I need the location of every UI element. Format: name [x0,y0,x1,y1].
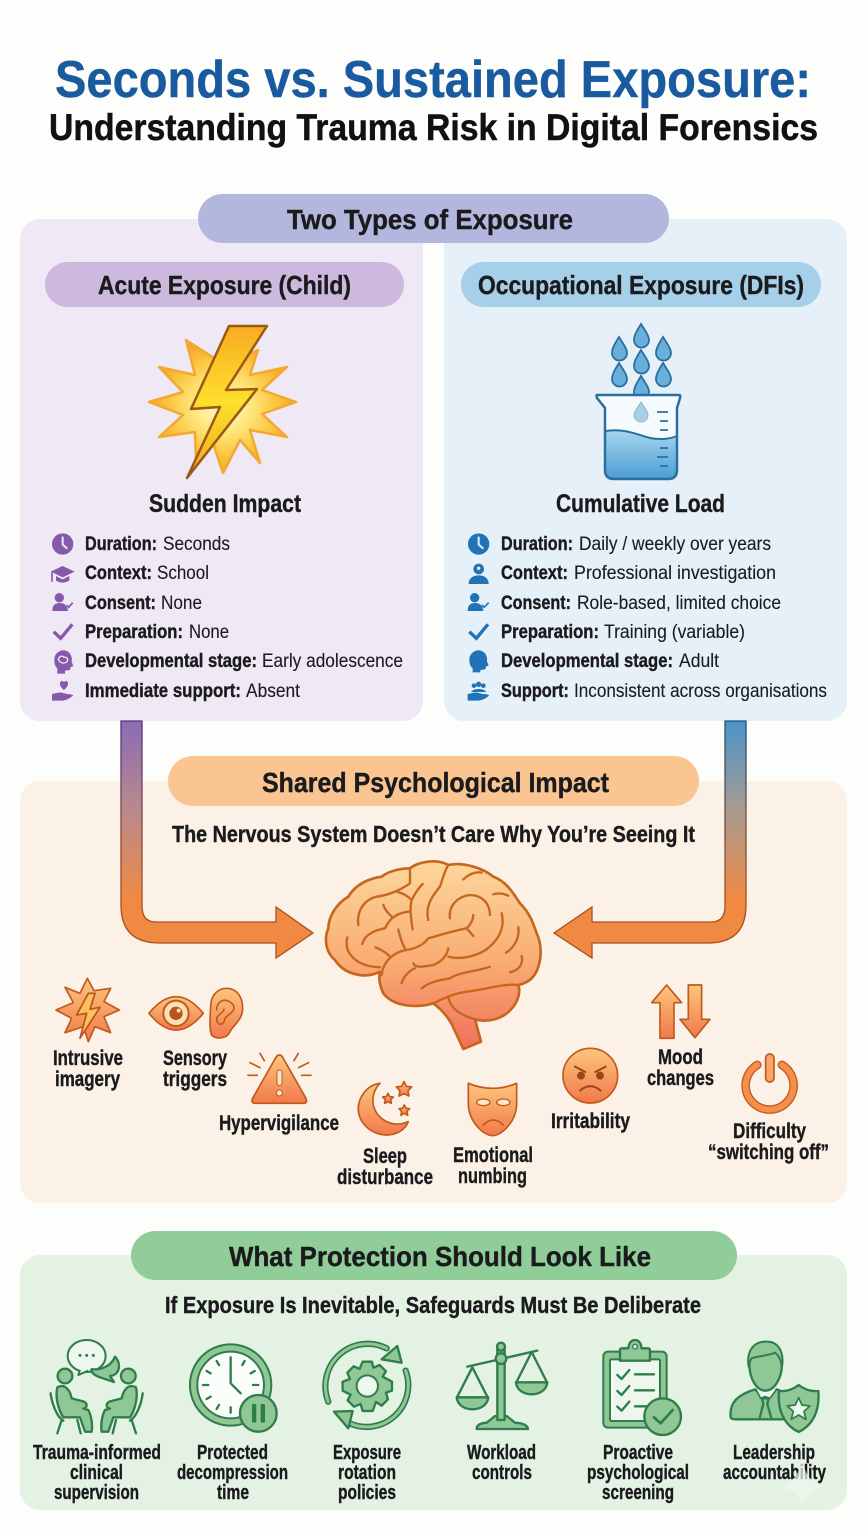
symptom: intrusive imagery: imagery [55,1068,120,1091]
safeguard: clinical supervision: supervision [54,1482,139,1504]
row: consent: None [161,593,202,614]
row: immediate support: Immediate support: [85,681,241,702]
safeguard: protected decompression time: Protected [197,1442,268,1464]
row: developmental stage [54,650,403,674]
row: support [468,681,827,702]
symptom: hypervigilance: Hypervigilance [219,1112,339,1135]
symptom: emotional numbing: numbing [458,1165,527,1188]
icon: beaker with drops [596,324,680,479]
row: duration: Duration: [501,534,573,555]
safeguard: psychological screening: Proactive [603,1442,673,1464]
row: context [469,563,776,584]
heading: what protection [131,1231,737,1280]
symptom: emotional numbing: Emotional [453,1144,533,1167]
list: occupational attributes [468,533,827,702]
symptom: intrusive imagery [53,978,123,1091]
symptom: difficulty switching off: “switching off” [708,1141,829,1164]
arrow: acute to brain [121,721,313,958]
row: consent: Consent: [501,593,571,614]
subheading: safeguards: If Exposure Is Inevitable, Safeguards Must Be Deliberate [165,1292,701,1318]
row: preparation: None [189,622,229,643]
row: context [51,563,209,584]
row: preparation [469,622,745,643]
sparkle watermark [780,1456,824,1505]
row: developmental stage: Developmental stage: [85,651,257,672]
row: immediate support: Absent [246,681,301,702]
symptom: sleep disturbance [337,1082,433,1189]
safeguard: exposure rotation: rotation [338,1462,396,1484]
row: developmental stage: Adult [679,651,720,672]
subheading: sudden impact: Sudden Impact [149,490,302,518]
safeguard: psychological screening [587,1340,689,1504]
symptom: mood changes [647,985,714,1090]
safeguard: psychological screening: screening [602,1482,674,1504]
symptom: sensory triggers: triggers [163,1068,227,1091]
row: context: Context: [85,563,152,584]
safeguard: protected decompression time: decompression [177,1462,288,1484]
heading: acute exposure: Acute Exposure (Child) [98,270,351,300]
panel: what protection should look like [20,1231,847,1510]
panel: occupational exposure [444,219,847,721]
list: acute attributes [51,533,403,702]
symptom: difficulty switching off [708,1054,829,1164]
safeguard: exposure rotation: policies [338,1482,396,1504]
row: context: School [157,563,209,584]
heading: shared psychological impact [168,756,699,806]
icon: brain [326,861,541,1049]
symptom: intrusive imagery: Intrusive [53,1047,123,1070]
row: support: Inconsistent across organisations [574,681,827,702]
heading: two types of exposure: Two Types of Exposure [287,204,573,235]
symptom: irritability: Irritability [551,1110,630,1133]
row: developmental stage: Developmental stage: [501,651,673,672]
row: duration [52,533,230,555]
safeguard: psychological screening: psychological [587,1462,689,1484]
safeguard: clinical supervision [33,1340,161,1504]
arrow: occupational to brain [554,721,746,958]
subheading: nervous system: The Nervous System Doesn’t Care Why You’re Seeing It [172,821,695,847]
subheading: cumulative load: Cumulative Load [556,490,725,518]
symptom: sensory triggers [149,988,243,1091]
panel: shared psychological impact [20,721,847,1203]
safeguard: clinical supervision: clinical [70,1462,123,1484]
row: context: Professional investigation [574,563,776,584]
row: preparation: Preparation: [501,622,599,643]
safeguard: workload controls [457,1343,547,1484]
heading: occupational exposure: Occupational Exposure (DFIs) [478,270,804,300]
heading: what protection: What Protection Should Look Like [229,1241,651,1272]
row: preparation: Preparation: [85,622,183,643]
symptom: sleep disturbance: Sleep [363,1145,407,1168]
row: duration: Duration: [85,534,157,555]
safeguard: leadership accountability: accountability [723,1462,827,1484]
row: consent: Consent: [85,593,156,614]
row: duration [468,533,771,555]
symptom: sensory triggers: Sensory [163,1047,227,1070]
safeguard: workload controls: controls [472,1462,532,1484]
row: duration: Daily / weekly over years [579,534,771,555]
row: context: Context: [501,563,568,584]
safeguard: leadership accountability [723,1342,827,1505]
heading: occupational exposure [461,262,821,307]
safeguard: exposure rotation: Exposure [333,1442,401,1464]
symptom: sleep disturbance: disturbance [337,1166,433,1189]
safeguard: clinical supervision: Trauma-informed [33,1442,161,1464]
panel: acute exposure [20,219,423,721]
title [49,51,818,148]
row: consent: Role-based, limited choice [577,593,781,614]
safeguard: protected decompression time: time [217,1482,249,1504]
symptom: irritability [551,1048,630,1133]
row: duration: Seconds [163,534,230,555]
row: developmental stage: Early adolescence [262,651,403,672]
row: consent [468,593,781,614]
icon: lightning burst [149,326,296,478]
row: preparation [54,622,229,643]
heading: acute exposure [45,262,404,307]
symptom: hypervigilance [219,1053,339,1135]
safeguard: protected decompression time [177,1344,288,1504]
row: support: Support: [501,681,569,702]
symptom: emotional numbing [453,1083,533,1188]
safeguard: exposure rotation [325,1344,408,1504]
safeguard: leadership accountability: Leadership [733,1442,815,1464]
row: consent [52,593,202,614]
heading: two types of exposure [198,194,669,243]
symptom: mood changes: changes [647,1067,714,1090]
row: preparation: Training (variable) [604,622,745,643]
title: Seconds vs. Sustained Exposure: [55,51,811,109]
safeguard: workload controls: Workload [467,1442,536,1464]
symptom: mood changes: Mood [658,1046,703,1069]
symptom: difficulty switching off: Difficulty [733,1120,806,1143]
heading: shared psychological impact: Shared Psychological Impact [262,767,609,798]
